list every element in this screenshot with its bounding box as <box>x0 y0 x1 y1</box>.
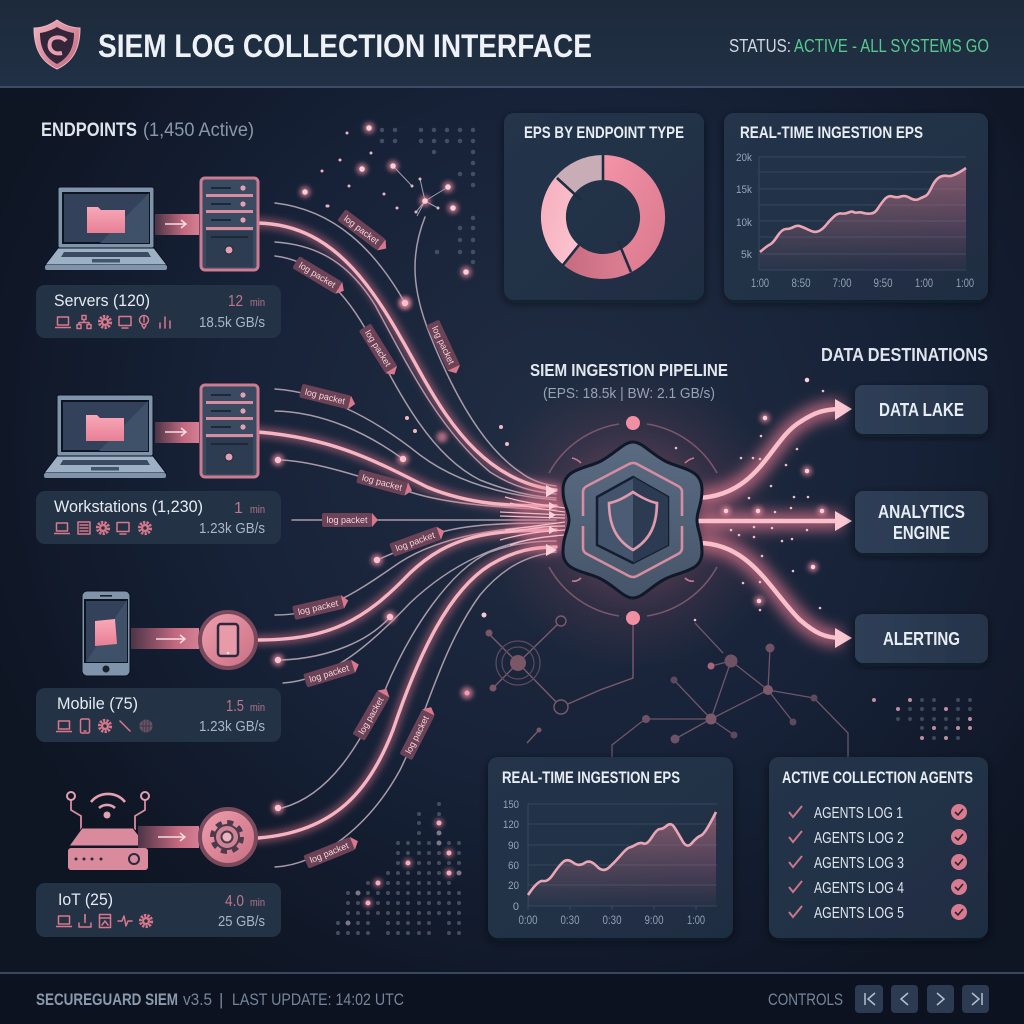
label 11: log packet <box>356 695 386 736</box>
line chart: 0:30 <box>560 915 580 927</box>
icon: server <box>201 385 258 477</box>
network graph: bottom right <box>612 623 848 757</box>
line chart: 7:00 <box>832 278 852 290</box>
central hub: siem pipeline shield <box>549 416 717 625</box>
thick stream glow <box>258 223 556 838</box>
line chart: 9:00 <box>644 915 664 927</box>
heading: endpoints: ENDPOINTS <box>41 120 137 141</box>
line chart: 15k <box>736 184 752 196</box>
panel: real-time ingestion eps top <box>724 113 988 300</box>
destination: analytics engine <box>855 491 988 553</box>
status text: ACTIVE - ALL SYSTEMS GO <box>794 36 989 56</box>
decorative dot matrix: bottom centre <box>338 804 459 933</box>
destination: data lake: DATA LAKE <box>879 400 964 420</box>
agent row 3 <box>789 854 967 872</box>
decorative dot matrix: lower right <box>874 700 970 738</box>
icon: router <box>67 792 149 870</box>
donut chart <box>553 155 653 272</box>
heading: EPS BY ENDPOINT TYPE <box>524 124 684 142</box>
decorative dot field: top network area <box>382 130 473 262</box>
line chart <box>503 799 717 927</box>
card: iot: 25 GB/s <box>218 914 265 930</box>
card: mobile <box>36 688 281 742</box>
card: servers: 18.5k GB/s <box>199 315 265 331</box>
label 12 <box>400 704 437 760</box>
card: iot: min <box>250 897 265 909</box>
panel: active collection agents <box>769 757 988 938</box>
network graph: bottom left target <box>467 615 633 743</box>
converging fine lines <box>500 497 565 545</box>
card: mobile: 1.23k GB/s <box>199 719 265 735</box>
card: iot: 4.0 <box>225 893 244 910</box>
label 12: log packet <box>403 714 431 755</box>
inner dark hexagon <box>597 477 668 563</box>
line chart: 20k <box>736 152 752 164</box>
line chart: 20 <box>508 880 519 892</box>
line chart: 0 <box>513 901 519 913</box>
footer controls <box>768 985 989 1013</box>
label 2: log packet <box>297 260 338 290</box>
card: iot: IoT (25) <box>58 890 113 909</box>
heading: data destinations: DATA DESTINATIONS <box>821 345 988 365</box>
converging glow at hub entry <box>513 482 577 554</box>
label 4: log packet <box>430 324 457 366</box>
line chart: 60 <box>508 860 519 872</box>
label 1: log packet <box>342 213 381 246</box>
label 13 <box>303 835 361 869</box>
card: mobile: min <box>250 702 265 714</box>
destination: alerting <box>855 614 988 663</box>
footer controls: CONTROLS <box>768 990 843 1009</box>
endpoint row: iot <box>36 792 281 937</box>
heading: siem ingestion pipeline <box>530 360 728 402</box>
card: mobile: Mobile (75) <box>57 694 138 713</box>
panel: real-time ingestion eps bottom <box>488 757 733 938</box>
line chart: 10k <box>736 217 752 229</box>
thin stream lines <box>275 203 556 867</box>
card: workstations: Workstations (1,230) <box>54 497 203 516</box>
thick stream cores <box>258 223 556 838</box>
label 3 <box>359 323 400 378</box>
icon: mobile circle <box>200 612 256 668</box>
footer bar <box>0 973 1024 1024</box>
sparkle particles around outputs <box>676 380 823 620</box>
label 13: log packet <box>308 840 350 865</box>
label 5 <box>299 384 357 411</box>
label 8: log packet <box>394 530 437 553</box>
card: servers: 12 <box>228 293 243 310</box>
output flows to destinations <box>698 399 852 648</box>
label 3: log packet <box>363 328 393 369</box>
card: servers <box>36 285 281 338</box>
converging arrow heads <box>546 485 557 556</box>
heading: siem ingestion pipeline: SIEM INGESTION PIPELINE <box>530 360 728 380</box>
header bar <box>0 0 1024 87</box>
connector arrow <box>131 628 199 649</box>
heading: ACTIVE COLLECTION AGENTS <box>782 769 973 787</box>
icon: header shield logo <box>34 20 80 69</box>
line chart: 1:00 <box>687 915 705 927</box>
card: mobile: 1.5 <box>226 698 244 715</box>
destination: data lake <box>855 385 988 434</box>
label 10: log packet <box>308 663 351 684</box>
endpoint row: servers <box>36 178 281 338</box>
agent row 5 <box>789 904 967 922</box>
heading: endpoints: (1,450 Active) <box>143 120 254 141</box>
agent row 4 <box>789 879 967 897</box>
label 9 <box>292 594 350 620</box>
stream end dots <box>278 303 507 808</box>
destination: analytics engine: ANALYTICS <box>878 502 965 522</box>
label 5: log packet <box>304 387 347 406</box>
connector arrow <box>155 214 199 235</box>
line chart: 0:00 <box>518 915 538 927</box>
card: servers: Servers (120) <box>54 291 150 310</box>
connector arrow <box>155 422 199 443</box>
label 8 <box>389 525 447 557</box>
arrow: alerting <box>835 628 852 648</box>
icon: server <box>201 178 258 270</box>
endpoint row: workstations <box>36 385 281 544</box>
label 10 <box>303 658 361 688</box>
connector arrow <box>138 826 199 848</box>
label 6 <box>356 469 414 497</box>
label 7 <box>322 513 378 527</box>
endpoint row: mobile <box>36 591 281 742</box>
heading: endpoints <box>41 120 254 141</box>
title: SIEM LOG COLLECTION INTERFACE <box>98 28 592 64</box>
line chart: 1:00 <box>956 278 974 290</box>
panel: eps by endpoint type <box>504 113 704 300</box>
label 6: log packet <box>361 472 404 493</box>
icon: laptop <box>45 187 167 270</box>
footer text: LAST UPDATE: 14:02 UTC <box>232 990 404 1009</box>
label 9: log packet <box>297 598 340 617</box>
agent row 5: AGENTS LOG 5 <box>814 905 904 922</box>
agent row 1 <box>789 804 967 822</box>
destination: analytics engine: ENGINE <box>893 523 950 543</box>
footer text: v3.5 <box>183 990 212 1009</box>
label 1 <box>337 209 390 254</box>
arrow: analytics <box>835 511 852 531</box>
card: iot <box>36 883 281 937</box>
icon: gear circle <box>200 809 256 865</box>
line chart: 90 <box>508 840 519 852</box>
hexagon body <box>563 442 702 598</box>
ring dots <box>626 416 640 430</box>
network graph: top sparkles <box>305 128 466 437</box>
label 7: log packet <box>326 515 368 525</box>
heading: siem ingestion pipeline: (EPS: 18.5k | BW: 2.1 GB/s) <box>543 386 715 402</box>
arrow: data lake <box>835 399 852 420</box>
destination: alerting: ALERTING <box>883 629 960 649</box>
line chart: 9:50 <box>874 278 892 290</box>
data streams from endpoints <box>258 203 577 867</box>
line chart <box>736 152 974 290</box>
footer text <box>36 990 404 1009</box>
card: servers: min <box>250 297 265 309</box>
footer text: | <box>219 990 223 1009</box>
label 2 <box>292 256 347 297</box>
agent row 2: AGENTS LOG 2 <box>814 830 904 847</box>
agent row 2 <box>789 829 967 847</box>
icon: laptop <box>44 395 166 478</box>
status text: STATUS: <box>729 36 791 56</box>
card: workstations: min <box>250 504 265 516</box>
heading: REAL-TIME INGESTION EPS <box>502 769 680 787</box>
label 4 <box>426 320 463 376</box>
line chart: 120 <box>503 819 519 831</box>
inner pink hexagon outline <box>583 463 682 577</box>
shield <box>609 492 657 550</box>
agent row 1: AGENTS LOG 1 <box>814 805 903 822</box>
ring arcs <box>549 424 717 616</box>
line chart: 8:50 <box>792 278 810 290</box>
agent row 3: AGENTS LOG 3 <box>814 855 904 872</box>
agent row 4: AGENTS LOG 4 <box>814 880 904 897</box>
line chart: 0:30 <box>602 915 622 927</box>
line chart: 1:00 <box>915 278 933 290</box>
line chart: 150 <box>503 799 519 811</box>
log packet labels <box>292 209 463 869</box>
card: workstations <box>36 491 281 544</box>
line chart: 1:00 <box>751 278 769 290</box>
footer text: SECUREGUARD SIEM <box>36 990 178 1009</box>
icon: phone <box>82 591 130 676</box>
label 11 <box>352 685 393 741</box>
heading: REAL-TIME INGESTION EPS <box>740 124 923 142</box>
card: workstations: 1 <box>234 500 243 517</box>
status text <box>729 36 989 56</box>
line chart: 5k <box>741 249 752 261</box>
hub glow <box>468 375 798 665</box>
card: workstations: 1.23k GB/s <box>199 521 265 537</box>
